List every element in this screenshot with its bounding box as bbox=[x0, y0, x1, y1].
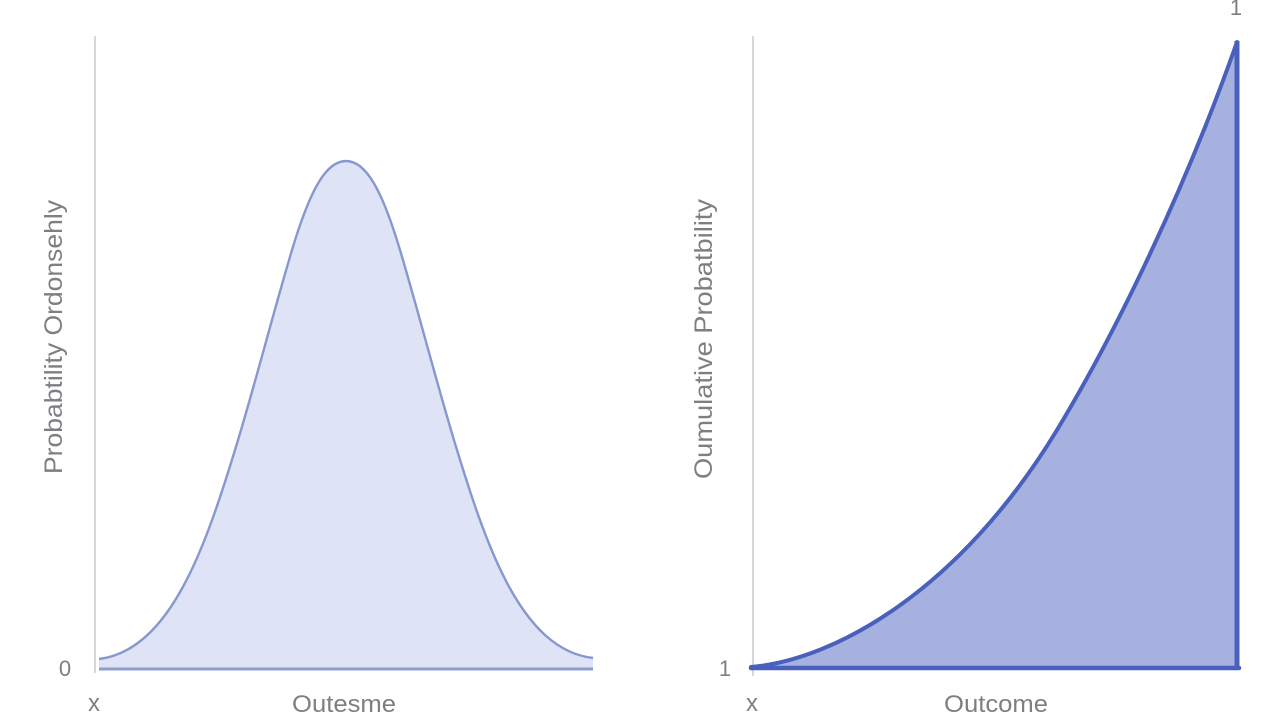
right edge line bbox=[1234, 41, 1240, 670]
panel: probability density chart bbox=[40, 36, 593, 718]
bell curve area fill bbox=[99, 161, 593, 669]
baseline bbox=[751, 666, 1239, 670]
x axis variable label: x bbox=[88, 690, 100, 717]
y axis title: Oumulative Probatbility bbox=[690, 198, 718, 479]
cumulative curve area fill bbox=[751, 42, 1237, 669]
baseline bbox=[99, 668, 593, 670]
y axis line bbox=[94, 36, 96, 673]
y axis title: Probabtility Ordonsehly bbox=[40, 199, 68, 474]
x axis variable label: x bbox=[746, 690, 758, 717]
x axis title: Outesme bbox=[292, 691, 396, 718]
x axis title: Outcome bbox=[944, 691, 1048, 718]
y axis zero label: 0 bbox=[59, 656, 71, 681]
y axis line bbox=[752, 36, 754, 676]
bell curve outline bbox=[99, 161, 593, 659]
cumulative curve outline bbox=[751, 42, 1237, 667]
y axis bottom label: 1 bbox=[719, 656, 731, 681]
panel: cumulative probability chart bbox=[690, 0, 1242, 718]
